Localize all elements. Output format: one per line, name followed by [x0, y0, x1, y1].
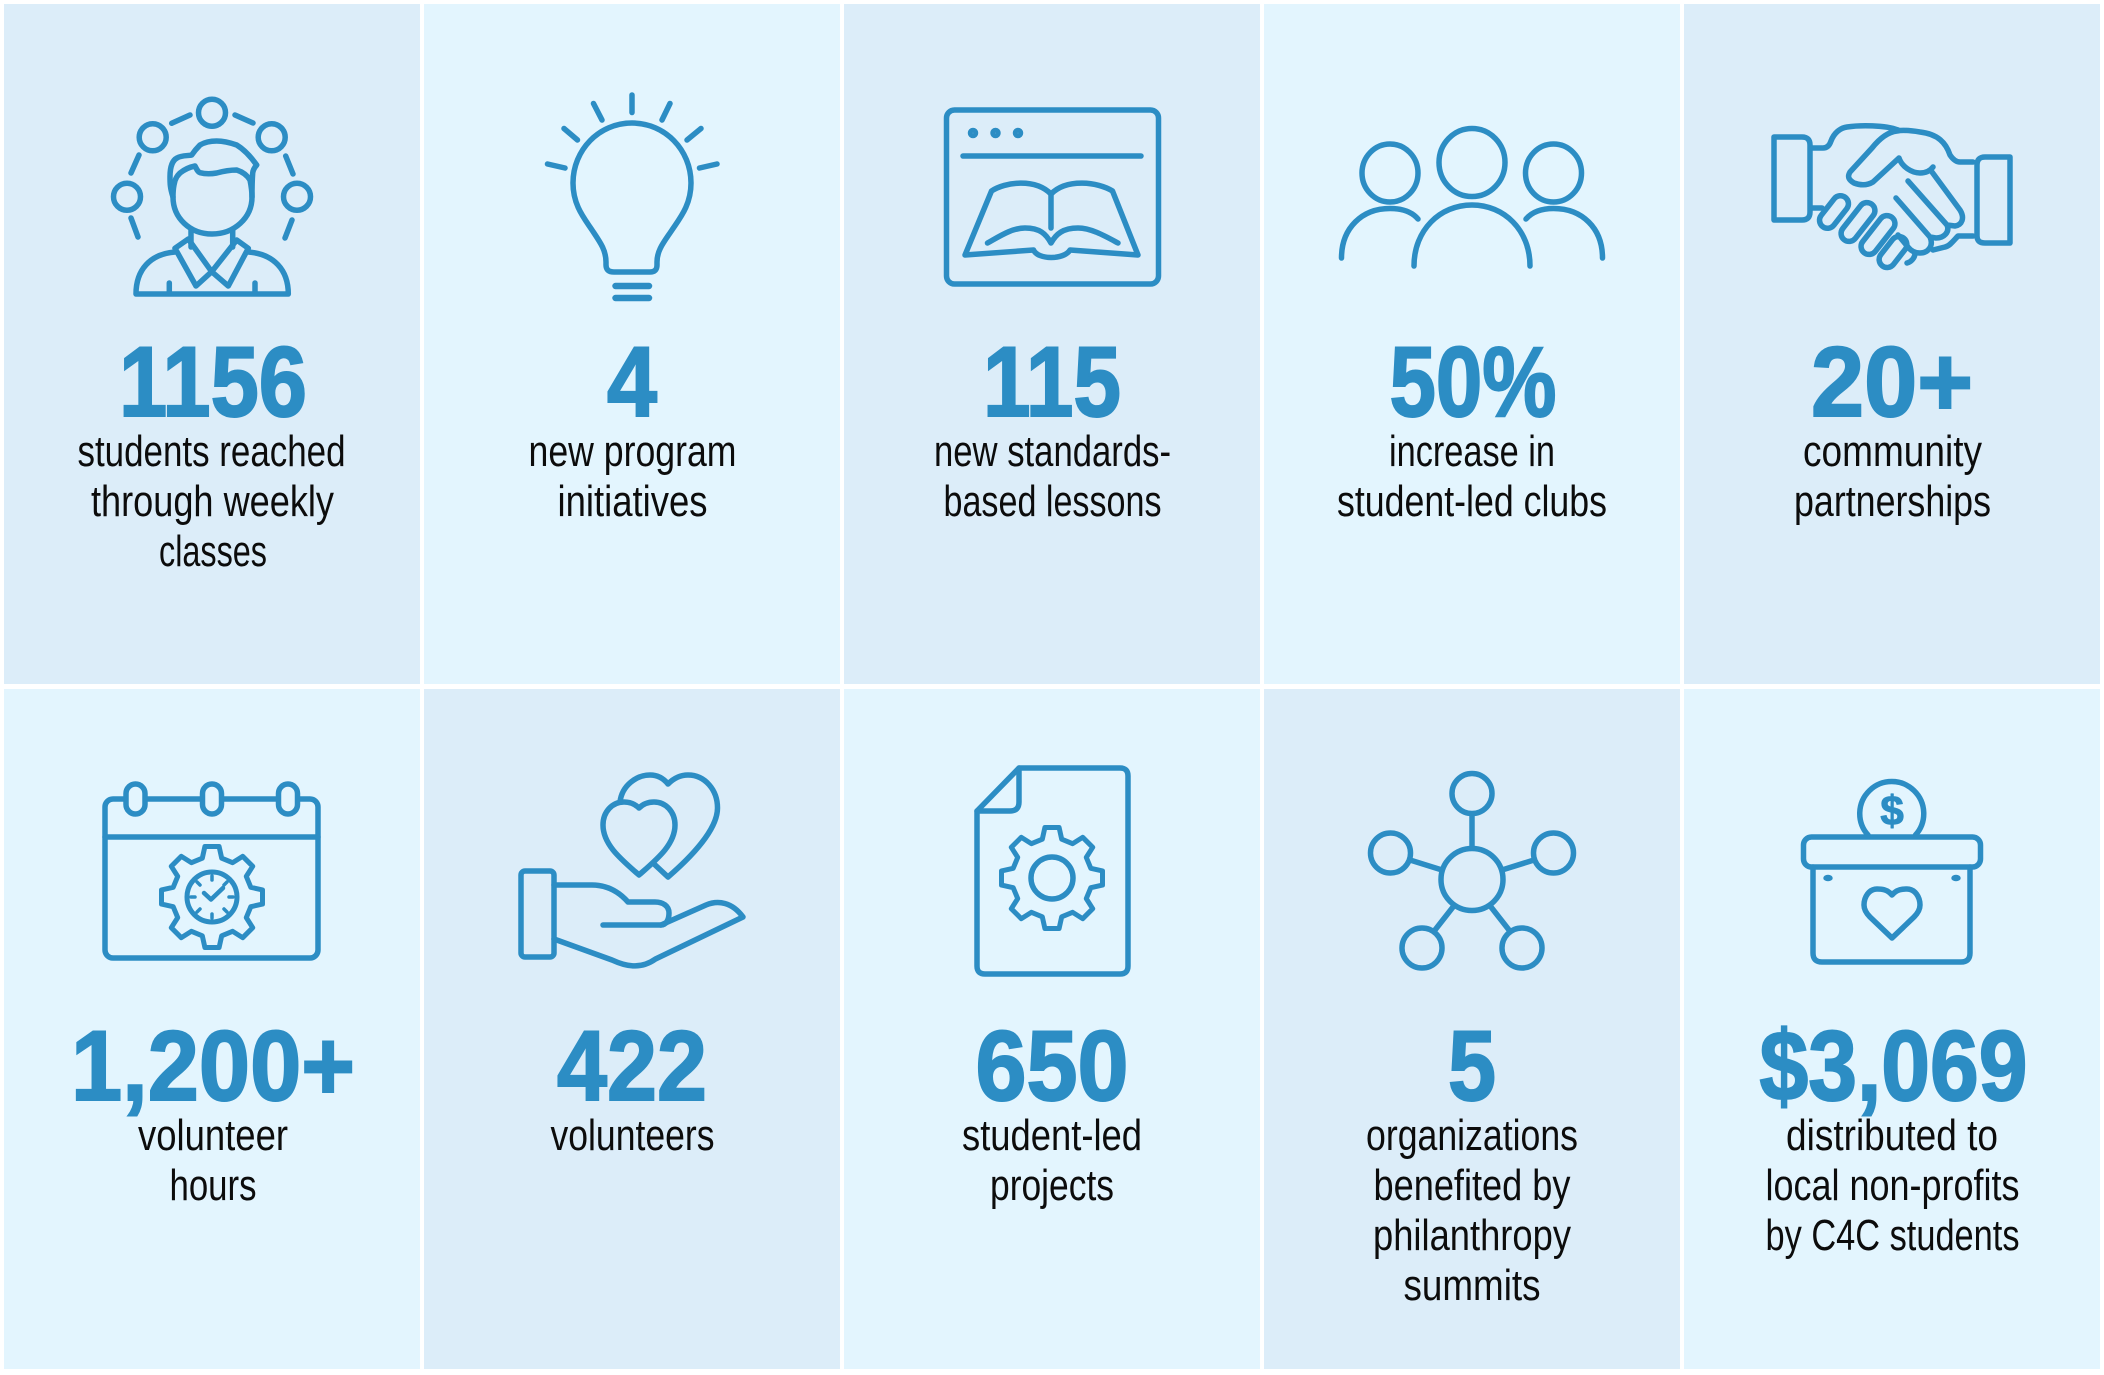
label: students reached through weekly classes [78, 427, 346, 576]
panel: community partnerships [1684, 4, 2100, 684]
panel: students reached [4, 4, 420, 684]
label: students reached through weekly classes: through weekly [91, 477, 334, 526]
label: new program initiatives: new program [528, 427, 736, 476]
label: students reached through weekly classes: students reached [78, 427, 346, 476]
label: organizations benefited by philanthropy summits: benefited by [1374, 1161, 1570, 1210]
icon: book in browser window [946, 110, 1158, 284]
icon: person with juggled circles [114, 99, 310, 294]
icon: light bulb [548, 95, 717, 298]
panel: new program initiatives [424, 4, 840, 684]
stat number: 115: 115 [983, 326, 1121, 437]
stat number: 20+: 20+ [1811, 326, 1973, 437]
stat number: 1,200+: 1,200+ [71, 1010, 355, 1121]
icon: calendar with gear and clock [105, 784, 318, 958]
panel: volunteer hours [4, 689, 420, 1369]
label: new program initiatives [528, 427, 736, 526]
label: organizations benefited by philanthropy summits [1366, 1111, 1578, 1310]
stat number: 4: 4 [607, 326, 657, 437]
label: new program initiatives: initiatives [558, 477, 708, 526]
stat number: $3,069: $3,069 [1760, 1010, 2028, 1121]
label: increase in student-led clubs: increase in [1389, 427, 1555, 476]
label: community partnerships: partnerships [1794, 477, 1991, 526]
label: community partnerships [1794, 427, 1991, 526]
label: student-led projects: student-led [962, 1111, 1142, 1160]
label: new standards-based lessons: based lessons [944, 477, 1162, 526]
icon: network hub [1370, 774, 1574, 968]
icon: three people [1342, 128, 1602, 266]
label: new standards-based lessons: new standards- [934, 427, 1171, 476]
stat number: 50%: 50% [1390, 326, 1556, 437]
icon: donation box with coin and heart [1804, 782, 1980, 962]
stat number: 1156: 1156 [119, 326, 307, 437]
label: volunteer hours: volunteer [138, 1111, 288, 1160]
panel: organizations benefited [1264, 689, 1680, 1369]
label: organizations benefited by philanthropy summits: summits [1404, 1261, 1540, 1310]
icon: donation box with coin and heart: $ [1880, 787, 1904, 834]
label: distributed to local non-profits by C4C students: local non-profits [1766, 1161, 2020, 1210]
panel: distributed to non-profits [1684, 689, 2100, 1369]
label: distributed to local non-profits by C4C students [1766, 1111, 2020, 1260]
label: students reached through weekly classes: classes [159, 527, 267, 576]
stat number: 422: 422 [557, 1010, 707, 1121]
label: organizations benefited by philanthropy summits: philanthropy [1373, 1211, 1571, 1260]
icon: hand holding hearts [521, 775, 743, 966]
label: organizations benefited by philanthropy summits: organizations [1366, 1111, 1578, 1160]
label: distributed to local non-profits by C4C students: distributed to [1786, 1111, 1998, 1160]
label: community partnerships: community [1803, 427, 1982, 476]
label: student-led projects: projects [990, 1161, 1114, 1210]
panel: volunteers [424, 689, 840, 1369]
panel: new standards-based lessons [844, 4, 1260, 684]
icon: handshake [1774, 126, 2010, 271]
label: volunteer hours [138, 1111, 288, 1210]
panel: student-led projects [844, 689, 1260, 1369]
label: new standards-based lessons [934, 427, 1171, 526]
icon: document with gear [977, 768, 1128, 974]
label: distributed to local non-profits by C4C students: by C4C students [1766, 1211, 2020, 1260]
stat number: 5: 5 [1448, 1010, 1496, 1121]
label: volunteers: volunteers [550, 1111, 714, 1160]
label: volunteer hours: hours [170, 1161, 256, 1210]
panel: student-led clubs [1264, 4, 1680, 684]
stat number: 650: 650 [976, 1010, 1128, 1121]
label: increase in student-led clubs [1337, 427, 1607, 526]
label: student-led projects [962, 1111, 1142, 1210]
label: increase in student-led clubs: student-led clubs [1337, 477, 1607, 526]
